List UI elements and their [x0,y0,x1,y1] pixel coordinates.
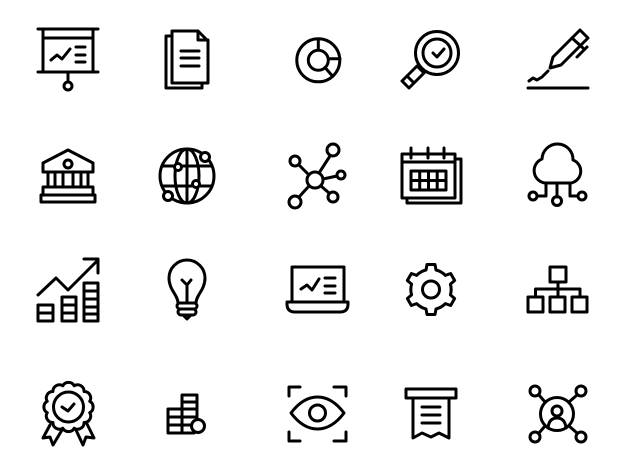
icon: user network [530,386,586,442]
icon: award badge [43,382,94,445]
icon: documents [166,31,208,88]
icon: presentation board [38,29,98,90]
icon: coin stacks [168,395,204,433]
icon: eye scan [289,387,346,441]
icon: network hub [289,144,345,208]
icon: magnifier with check [402,32,458,88]
icon: org chart [528,267,587,312]
icon: cloud network [529,144,586,206]
icon: donut chart [297,39,340,82]
icon: gear [407,264,455,314]
icon: bank building [41,150,95,202]
icon: light bulb [169,260,205,319]
icon: growth chart [38,259,98,321]
icon: globe with nodes [160,149,214,203]
icon: receipt [406,389,456,438]
icon: calendar [402,148,461,203]
icon: laptop with chart [287,267,348,312]
icon: pen signature [528,30,588,88]
